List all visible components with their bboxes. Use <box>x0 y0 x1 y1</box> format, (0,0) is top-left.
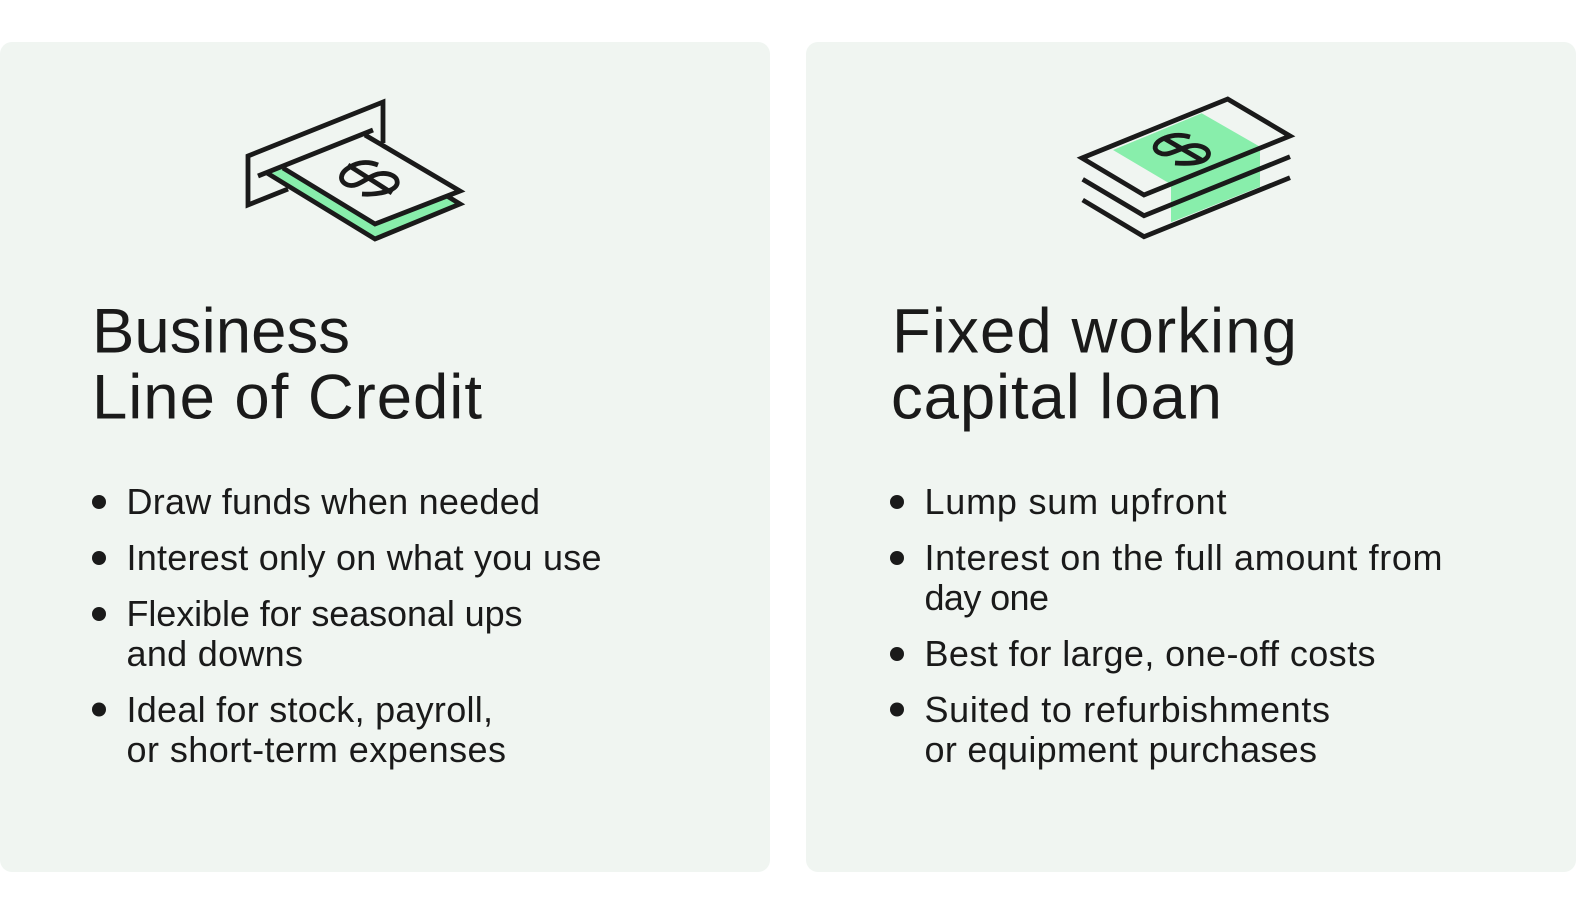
bullet: ideal for: or short-term expenses <box>126 729 506 770</box>
bullet: interest only: Interest only on what you use <box>126 537 602 578</box>
bullet: ideal for: Ideal for stock, payroll, <box>126 689 493 730</box>
heading: capital loan <box>891 362 1222 432</box>
bullet: draw funds: Draw funds when needed <box>126 481 540 522</box>
bullet: suited to <box>890 689 1330 770</box>
bullet: suited to: Suited to refurbishments <box>924 689 1330 730</box>
panel background <box>806 42 1576 872</box>
icon: stack of banknotes <box>1082 99 1290 237</box>
bullet: best for: Best for large, one-off costs <box>924 633 1376 674</box>
icon: banknote from slot <box>248 102 460 239</box>
panel: business line of credit <box>0 42 770 872</box>
bullet: flexible <box>92 593 522 674</box>
bullet: interest on full amount <box>890 537 1442 618</box>
bullet: flexible: Flexible for seasonal ups <box>126 593 522 634</box>
bullet: lump sum: Lump sum upfront <box>924 481 1226 522</box>
bullet list <box>890 481 1442 770</box>
heading <box>891 296 1297 432</box>
heading <box>92 296 482 432</box>
bullet: flexible: and downs <box>126 633 303 674</box>
bullet: suited to: or equipment purchases <box>924 729 1317 770</box>
bullet: ideal for <box>92 689 506 770</box>
panel background <box>0 42 770 872</box>
bullet: interest on full amount: day one <box>924 577 1049 618</box>
panel: fixed working capital loan <box>806 42 1576 872</box>
bullet: interest on full amount: Interest on the full amount from <box>924 537 1442 578</box>
heading: Fixed working <box>892 296 1297 366</box>
heading: Business <box>92 296 350 366</box>
bullet list <box>92 481 602 770</box>
heading: Line of Credit <box>92 362 482 432</box>
